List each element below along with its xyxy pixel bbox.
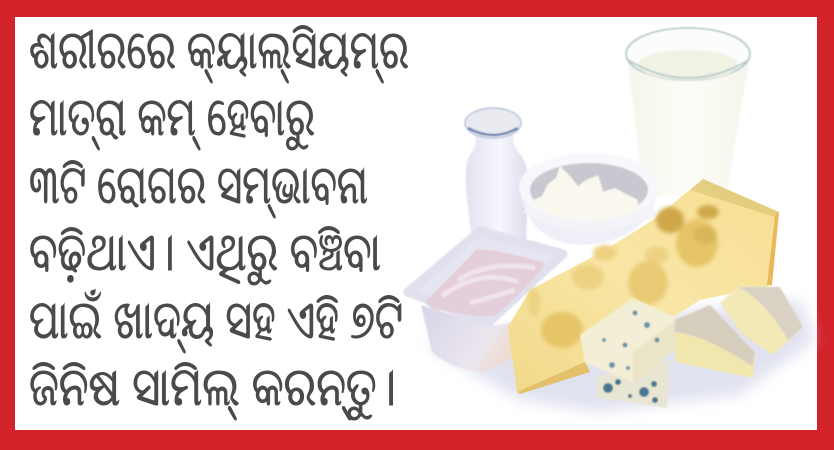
headline text: ଶରୀରରେ କ୍ୟାଲ୍‌ସିୟମ୍‌ର xyxy=(29,20,409,83)
headline text: ମାତ୍ରା କମ୍‌ ହେବାରୁ xyxy=(29,87,315,150)
icon: yogurt cup xyxy=(408,231,563,373)
headline text: ପାଇଁ ଖାଦ୍ୟ ସହ ଏହି ୭ଟି xyxy=(29,289,403,353)
icon: brie wedges xyxy=(675,285,803,378)
icon: blue cheese blocks xyxy=(580,298,675,408)
headline text: ୩ଟି ରୋଗର ସମ୍ଭାବନା xyxy=(29,155,368,218)
icon: swiss cheese wedge xyxy=(508,179,779,394)
headline text: ବଢ଼ିଥାଏ। ଏଥିରୁ ବଞ୍ଚିବା xyxy=(29,222,381,285)
icon: glass of milk xyxy=(626,28,750,196)
icon: bowl of cottage cheese xyxy=(519,153,659,245)
illustration: dairy products xyxy=(408,28,815,412)
cheese holes xyxy=(528,205,719,348)
table shadow xyxy=(425,300,815,412)
headline text: ଜିନିଷ ସାମିଲ୍‌ କରନ୍ତୁ। xyxy=(29,357,396,420)
icon: yogurt bottle xyxy=(465,108,528,240)
headline text xyxy=(29,20,409,420)
